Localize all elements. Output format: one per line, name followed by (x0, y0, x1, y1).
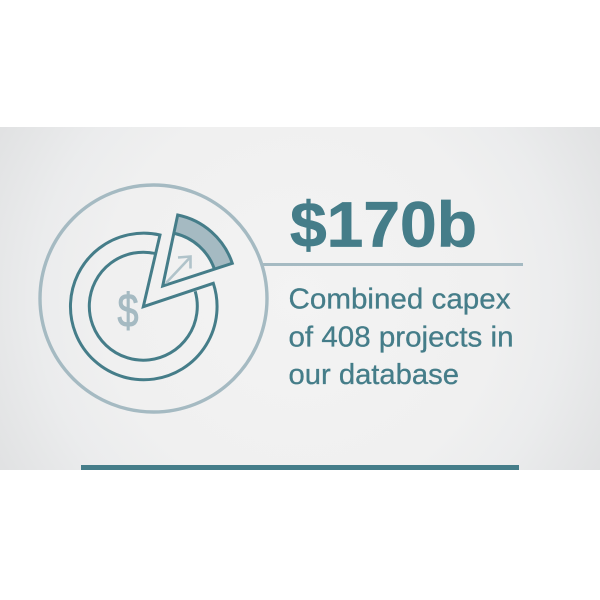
highlighted slice band (175, 215, 232, 269)
dollar sign: $ (118, 284, 138, 336)
divider rule (263, 263, 523, 266)
pie outer ring (70, 233, 217, 380)
pie inner ring (89, 252, 197, 360)
background panel (0, 127, 600, 470)
icon: pie chart with dollar and arrow (40, 185, 267, 412)
bottom accent bar (81, 465, 519, 470)
line 2: of 408 projects in (288, 322, 514, 354)
description text (288, 284, 514, 391)
headline figure: $170b (290, 188, 477, 260)
outer circle (40, 185, 267, 412)
arrow (166, 256, 190, 283)
line 1: Combined capex (288, 284, 511, 316)
pie slice outline (163, 215, 232, 286)
slice inner arc (175, 234, 214, 269)
line 3: our database (288, 359, 459, 391)
